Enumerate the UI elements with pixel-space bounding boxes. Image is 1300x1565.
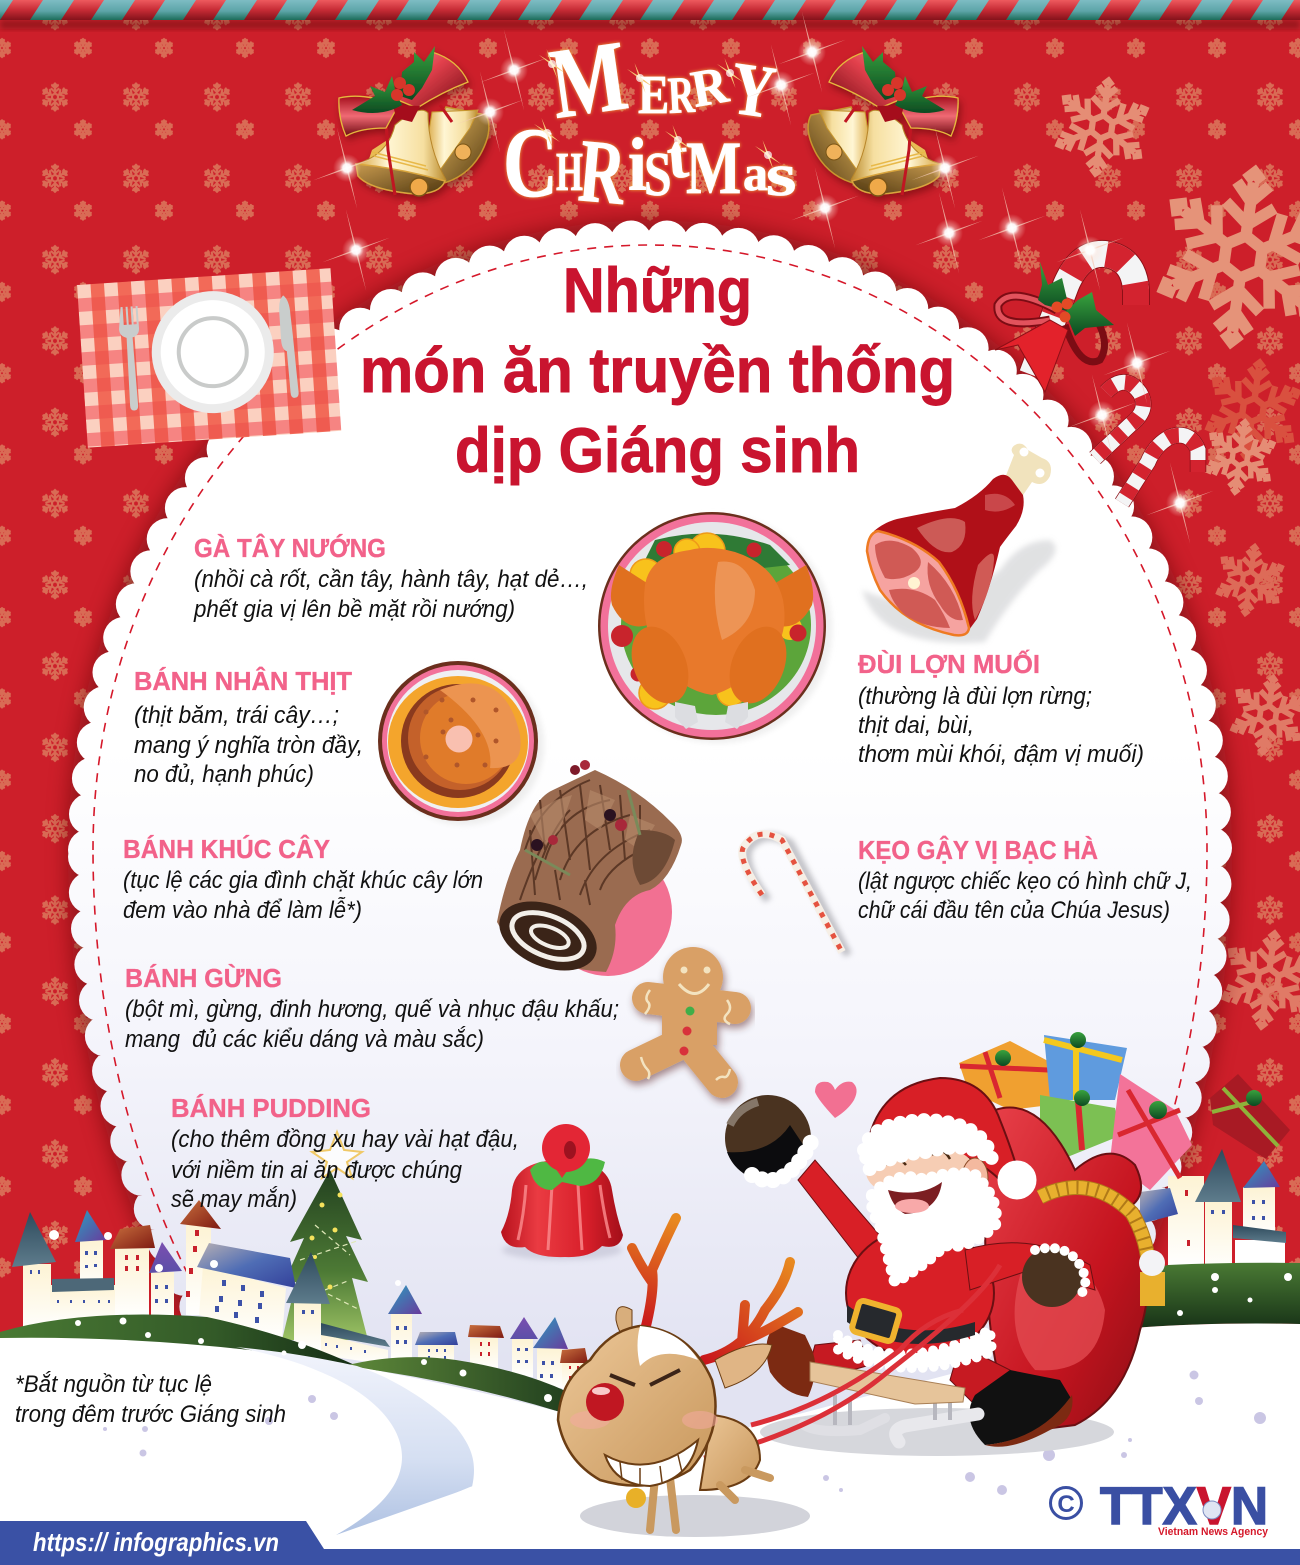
falling snow dots xyxy=(49,1230,1292,1495)
legs and boots xyxy=(766,1325,1073,1447)
illustration: peppermint candy cane xyxy=(742,834,848,955)
reindeer shadow xyxy=(580,1495,810,1537)
merry christmas lettering: a xyxy=(743,145,768,201)
text block: đùi lợn muối: (thường là đùi lợn rừng; xyxy=(858,683,1092,710)
merry christmas lettering xyxy=(503,19,796,224)
illustration: gingerbread man xyxy=(636,947,735,1082)
placemat with plate and cutlery xyxy=(77,268,341,448)
title: món ăn truyền thống xyxy=(360,336,955,406)
sparkles xyxy=(313,11,1214,544)
text block: bánh pudding: sẽ may mắn) xyxy=(171,1186,297,1213)
illustration: meat pie xyxy=(378,661,544,825)
dashed stitching line xyxy=(93,245,1207,1565)
website url: https:// infographics.vn xyxy=(33,1527,279,1557)
merry christmas lettering: R xyxy=(667,65,696,125)
beard xyxy=(872,1173,996,1282)
far gift box xyxy=(1210,1074,1290,1159)
footnote: *Bắt nguồn từ tục lệ xyxy=(15,1371,212,1398)
title: Những xyxy=(563,256,752,326)
merry christmas lettering: S xyxy=(644,141,672,209)
text block: bánh khúc cây: BÁNH KHÚC CÂY xyxy=(123,834,330,864)
merry christmas lettering: M xyxy=(686,126,741,210)
illustration: snow village left xyxy=(12,1170,588,1390)
text block: gà tây nướng: GÀ TÂY NƯỚNG xyxy=(194,533,386,563)
footnote xyxy=(15,1371,286,1428)
text block: bánh nhân thịt: (thịt băm, trái cây…; xyxy=(134,702,339,729)
scalloped panel shadow xyxy=(89,241,1211,1565)
body xyxy=(838,1228,1095,1368)
footer band xyxy=(0,1521,1300,1565)
face xyxy=(866,1144,988,1200)
merry christmas lettering: M xyxy=(544,19,634,140)
agency logo: TTXVN xyxy=(1100,1477,1268,1536)
text block: gà tây nướng: phết gia vị lên bề mặt rồi nướng) xyxy=(193,596,515,623)
illustration: roast turkey plate xyxy=(598,512,832,743)
text block: bánh pudding: với niềm tin ai ăn được chúng xyxy=(171,1157,463,1184)
text block: đùi lợn muối: ĐÙI LỢN MUỐI xyxy=(858,649,1040,679)
merry christmas lettering: i xyxy=(628,124,647,207)
right bells with holly xyxy=(808,46,958,196)
heart xyxy=(815,1082,857,1118)
merry christmas lettering: C xyxy=(503,108,558,219)
illustration: santa with sack on sled xyxy=(704,1032,1290,1458)
text block: bánh gừng: mang đủ các kiểu dáng và màu sắc) xyxy=(125,1026,484,1053)
text block: bánh gừng xyxy=(125,963,619,1053)
laughing mouth xyxy=(888,1182,942,1214)
text block: bánh gừng: BÁNH GỪNG xyxy=(125,963,282,993)
text block: bánh nhân thịt: mang ý nghĩa tròn đầy, xyxy=(134,732,363,759)
title: dịp Giáng sinh xyxy=(455,416,860,486)
text block: đùi lợn muối xyxy=(858,649,1144,768)
title xyxy=(360,256,955,486)
text block: bánh pudding: (cho thêm đồng xu hay vài hạt đậu, xyxy=(171,1126,519,1153)
agency logo: C xyxy=(1057,1491,1075,1518)
sack xyxy=(985,1108,1148,1432)
text block: bánh pudding: BÁNH PUDDING xyxy=(171,1093,371,1123)
gold star on the tree xyxy=(312,1132,362,1178)
merry christmas lettering: t xyxy=(664,122,691,192)
text block: bánh khúc cây: (tục lệ các gia đình chặt khúc cây lớn xyxy=(123,867,483,894)
merry christmas lettering: R xyxy=(575,120,630,224)
text block: kẹo gậy vị bạc hà xyxy=(858,835,1192,924)
agency logo: Vietnam News Agency xyxy=(1158,1526,1269,1538)
illustration: reindeer xyxy=(558,1218,798,1530)
merry christmas lettering: E xyxy=(638,66,669,126)
text block: bánh nhân thịt: no đủ, hạnh phúc) xyxy=(134,761,314,788)
text block: bánh gừng: (bột mì, gừng, đinh hương, quế và nhục đậu khấu; xyxy=(125,996,619,1023)
illustration: jelly pudding xyxy=(501,1124,623,1260)
text block: gà tây nướng xyxy=(193,533,588,623)
merry christmas lettering: R xyxy=(687,55,733,118)
hat xyxy=(868,1078,1036,1199)
text block: bánh khúc cây: đem vào nhà để làm lễ*) xyxy=(123,896,362,924)
merry christmas lettering: s xyxy=(766,142,796,209)
text block: đùi lợn muối: thơm mùi khói, đậm vị muối) xyxy=(858,741,1144,768)
hat fur band xyxy=(864,1120,992,1170)
large snowflakes on the right xyxy=(1049,74,1300,1033)
raised mitten xyxy=(725,1095,812,1181)
text block: đùi lợn muối: thịt dai, bùi, xyxy=(858,712,974,739)
illustration: yule log xyxy=(489,760,682,984)
text block: bánh nhân thịt xyxy=(134,666,363,788)
merry christmas lettering: Y xyxy=(726,45,780,134)
illustration: snowy hills and road xyxy=(0,1315,1300,1549)
sled shadow xyxy=(760,1408,1114,1456)
text block: kẹo gậy vị bạc hà: chữ cái đầu tên của Chúa Jesus) xyxy=(858,897,1170,924)
raised arm xyxy=(798,1160,882,1268)
tongue xyxy=(895,1199,929,1213)
text block: kẹo gậy vị bạc hà: KẸO GẬY VỊ BẠC HÀ xyxy=(858,835,1098,865)
gifts xyxy=(959,1032,1192,1190)
text block: kẹo gậy vị bạc hà: (lật ngược chiếc kẹo có hình chữ J, xyxy=(858,868,1192,895)
reins xyxy=(704,1265,1000,1458)
second mitten xyxy=(1022,1247,1086,1307)
merry christmas lettering: H xyxy=(556,141,583,202)
text block: bánh nhân thịt: BÁNH NHÂN THỊT xyxy=(134,666,352,696)
candy canes and bow xyxy=(995,254,1198,503)
striped candy top bar xyxy=(0,0,1300,29)
rope and tassel xyxy=(1040,1188,1165,1306)
text block: bánh pudding xyxy=(171,1093,519,1213)
text block: gà tây nướng: (nhồi cà rốt, cần tây, hành tây, hạt dẻ…, xyxy=(194,566,588,593)
illustration: village and hill right xyxy=(1122,1149,1300,1329)
sled xyxy=(803,1362,978,1442)
footnote: trong đêm trước Giáng sinh xyxy=(15,1401,286,1428)
text block: bánh khúc cây xyxy=(123,834,483,924)
christmas tree xyxy=(282,1170,368,1340)
scalloped white panel xyxy=(89,241,1211,1565)
left bells with holly xyxy=(339,46,489,196)
illustration: salted ham xyxy=(862,444,1056,643)
